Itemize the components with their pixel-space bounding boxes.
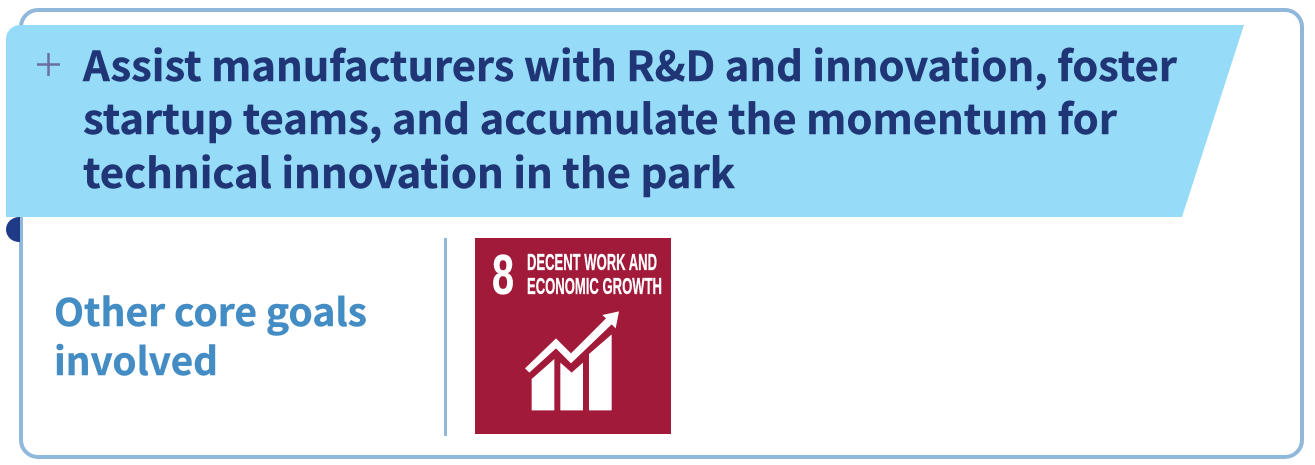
icon: SDG 8 decent work and economic growth tile: ECONOMIC GROWTH xyxy=(527,273,662,299)
icon: SDG 8 decent work and economic growth tile xyxy=(475,238,671,434)
label: other core goals involved: Other core goals xyxy=(54,282,367,337)
icon: plus sign xyxy=(37,53,60,76)
banner: light blue heading background xyxy=(6,25,1244,217)
icon: SDG 8 decent work and economic growth tile: 8 xyxy=(492,243,514,307)
label: other core goals involved xyxy=(54,282,367,386)
divider: vertical line xyxy=(444,238,447,436)
icon: SDG 8 decent work and economic growth tile: DECENT WORK AND xyxy=(527,249,657,275)
heading: main goal text xyxy=(82,33,1177,200)
heading: main goal text: technical innovation in the park xyxy=(83,140,735,200)
heading: main goal text: startup teams, and accumulate the momentum for xyxy=(83,86,1117,146)
fold: dark navy banner tab xyxy=(6,217,20,242)
label: other core goals involved: involved xyxy=(54,331,218,386)
heading: main goal text: Assist manufacturers with R&D and innovation, foster xyxy=(82,33,1177,93)
